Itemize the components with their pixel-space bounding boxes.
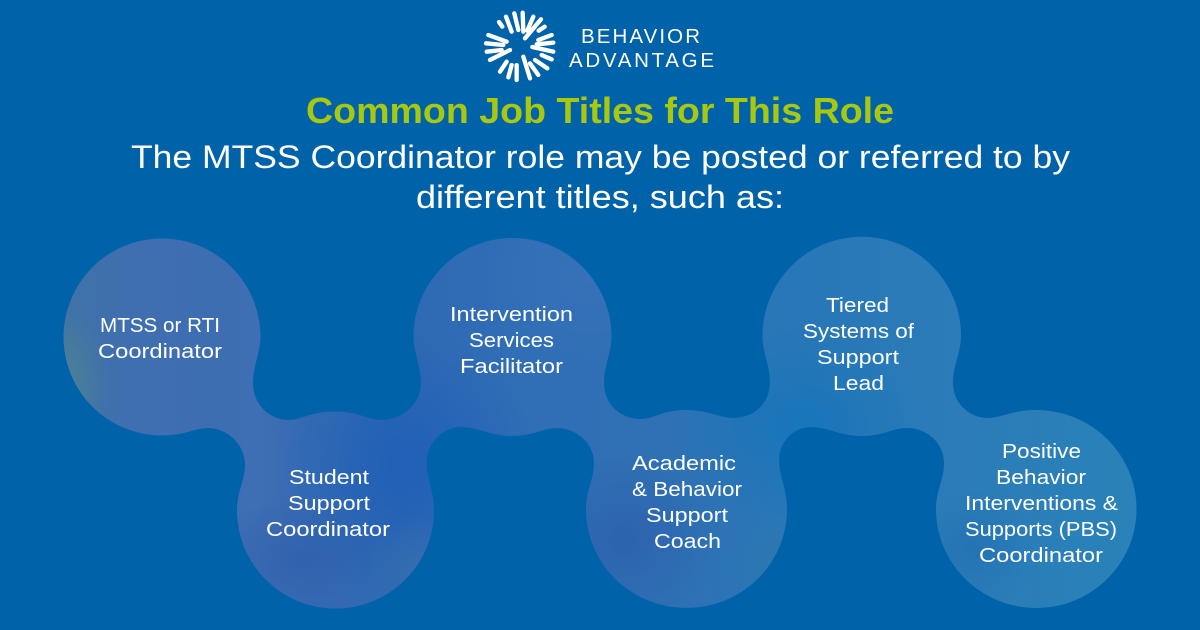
- subtitle: different titles, such as:: [416, 179, 784, 215]
- circle 5 label: Support: [817, 347, 900, 369]
- circle 5 label: Tiered: [826, 295, 889, 317]
- circle 6 label: Behavior: [996, 467, 1086, 489]
- circle 1 label: MTSS or RTI: [100, 315, 220, 337]
- circle 4 label: & Behavior: [632, 479, 742, 501]
- circle 4 label: [632, 453, 742, 553]
- circle 6 label: Coordinator: [979, 545, 1103, 567]
- panel: connected circles chain: [64, 236, 1136, 608]
- subtitle: [131, 139, 1070, 215]
- circle 5 label: Systems of: [803, 321, 914, 343]
- circle 5 label: [803, 295, 914, 395]
- title: Common Job Titles for This Role: [306, 90, 894, 131]
- circle 3 label: Intervention: [450, 304, 573, 326]
- circle 4 label: Coach: [654, 531, 721, 553]
- logo wordmark: [569, 25, 714, 72]
- circle 3 label: Facilitator: [460, 356, 563, 378]
- logo wordmark: ADVANTAGE: [569, 49, 714, 72]
- subtitle: The MTSS Coordinator role may be posted or referred to by: [131, 139, 1070, 175]
- icon: sunburst logo mark: [486, 13, 553, 80]
- circle 2 label: [266, 467, 390, 541]
- logo: Behavior Advantage: [486, 13, 714, 80]
- circle 3 label: Services: [469, 330, 554, 352]
- circle 2 label: Coordinator: [266, 519, 390, 541]
- circle 1 label: Coordinator: [98, 341, 222, 363]
- connected blob shape: [64, 236, 1136, 608]
- circle 3 label: [450, 304, 573, 378]
- circle 6 label: [965, 441, 1119, 567]
- circle 5 label: Lead: [833, 373, 884, 395]
- circle 4 label: Support: [646, 505, 729, 527]
- circle 2 label: Support: [288, 493, 371, 515]
- circle 6 label: Supports (PBS): [965, 519, 1117, 541]
- circle 1 label: [98, 315, 222, 363]
- circle 6 label: Interventions &: [965, 493, 1119, 515]
- circle 2 label: Student: [289, 467, 370, 489]
- circle 6 label: Positive: [1002, 441, 1081, 463]
- circle 4 label: Academic: [632, 453, 736, 475]
- logo wordmark: BEHAVIOR: [581, 25, 700, 48]
